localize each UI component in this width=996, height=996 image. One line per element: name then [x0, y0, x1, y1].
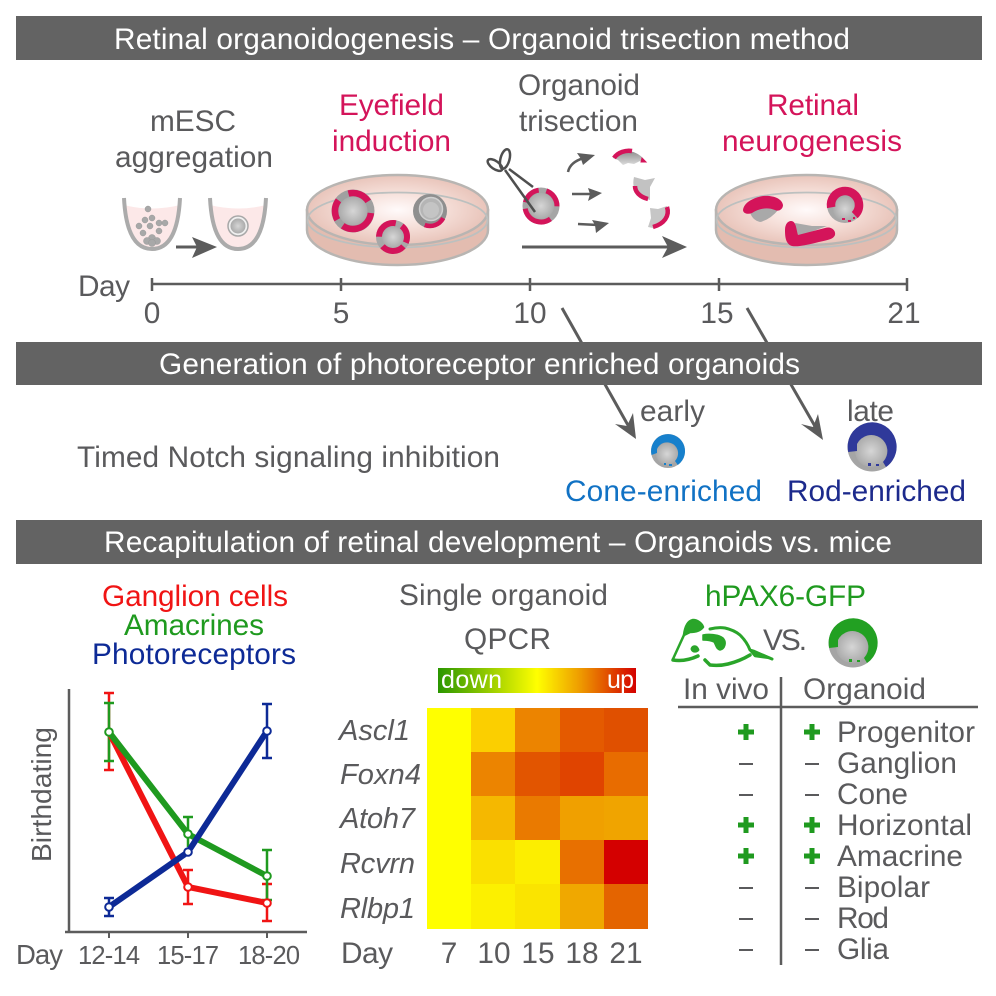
- header: photoreceptor enriched organoids: [16, 342, 982, 385]
- arrow: early inhibition: [562, 308, 636, 439]
- label: mESC aggregation: aggregation: [115, 141, 273, 174]
- chart axes: [65, 689, 307, 938]
- table rules: [678, 677, 978, 965]
- color scale: up: [607, 666, 634, 694]
- icon: well with scattered cells: [124, 198, 180, 249]
- heading: single organoid QPCR: [399, 579, 608, 656]
- timeline: 10: [513, 297, 547, 330]
- y axis label: Birthdating: [25, 727, 57, 862]
- color scale: down: [441, 666, 502, 694]
- icon: trisected fragments: [613, 151, 668, 228]
- heatmap day labels: 15: [521, 937, 555, 970]
- series: amacrines: [105, 728, 271, 880]
- line chart: birthdating: [16, 689, 307, 970]
- series: photoreceptors: [105, 727, 271, 911]
- label: Organoid trisection: trisection: [519, 105, 638, 138]
- label: Eyefield induction: [332, 89, 451, 158]
- legend: cell types: [92, 580, 296, 671]
- heatmap day labels: 7: [441, 937, 457, 970]
- label: late: late: [847, 395, 894, 428]
- heatmap gene labels: Rcvrn: [340, 848, 415, 880]
- cell type labels: Cone: [837, 778, 908, 811]
- icon: GFP organoid: [828, 618, 878, 668]
- error bars: [104, 693, 272, 921]
- cell type labels: Ganglion: [837, 747, 957, 780]
- icon: scissors: [486, 148, 535, 212]
- heatmap day labels: 21: [609, 937, 643, 970]
- arrow: well to well: [176, 237, 217, 258]
- heatmap day labels: [341, 937, 643, 970]
- arrow: late inhibition: [747, 308, 823, 440]
- icon: petri dish with eyefield organoids: [307, 175, 488, 265]
- timeline: 21: [887, 297, 921, 330]
- timeline: [78, 270, 921, 330]
- label: mESC aggregation: [115, 105, 273, 174]
- header: photoreceptor enriched organoids: Generation of photoreceptor enriched organoids: [159, 348, 800, 381]
- legend: cell types: Ganglion cells: [102, 580, 288, 613]
- cell type labels: Progenitor: [837, 716, 975, 749]
- x axis labels: Day: [16, 939, 63, 970]
- table header: In vivo: [683, 673, 769, 706]
- heatmap: [427, 708, 648, 929]
- heatmap gene labels: [337, 715, 421, 925]
- x axis labels: [16, 939, 300, 970]
- cell type labels: Amacrine: [837, 840, 963, 873]
- x axis labels: 15-17: [157, 942, 219, 970]
- heading: single organoid QPCR: Single organoid: [399, 579, 608, 612]
- organoid 1: [331, 189, 375, 233]
- header: recapitulation of retinal development: Recapitulation of retinal development – Organoids vs. mice: [104, 526, 892, 559]
- icon: rod-enriched organoid: [848, 422, 897, 472]
- label: Retinal neurogenesis: Retinal: [767, 89, 859, 122]
- arrows: fragments: [568, 153, 609, 233]
- heading: single organoid QPCR: QPCR: [464, 623, 551, 656]
- organoid fragment left: [743, 196, 783, 222]
- legend: cell types: Amacrines: [124, 609, 264, 642]
- heatmap gene labels: Foxn4: [340, 759, 421, 791]
- color scale: [438, 666, 636, 694]
- label: Organoid trisection: [518, 69, 640, 138]
- label: mESC aggregation: mESC: [150, 105, 236, 138]
- heatmap day labels: 18: [565, 937, 599, 970]
- table header: [683, 673, 926, 706]
- label: Cone-enriched: Cone-enriched: [565, 475, 762, 508]
- table header: Organoid: [803, 673, 926, 706]
- header: recapitulation of retinal development: [16, 520, 982, 564]
- header: retinal organoidogenesis: Retinal organoidogenesis – Organoid trisection method: [114, 23, 850, 56]
- label: Organoid trisection: Organoid: [518, 69, 640, 102]
- label: Eyefield induction: induction: [332, 125, 451, 158]
- in vivo markers: [738, 724, 754, 950]
- text: timed Notch signaling inhibition: Timed Notch signaling inhibition: [77, 441, 500, 474]
- table: cell type expression: [678, 673, 978, 966]
- icon: well with aggregate: [210, 198, 266, 249]
- heatmap gene labels: Rlbp1: [340, 893, 415, 925]
- heatmap day labels: Day: [341, 937, 393, 970]
- heatmap day labels: 10: [477, 937, 511, 970]
- cell type labels: Glia: [837, 933, 889, 966]
- legend: cell types: Photoreceptors: [92, 638, 296, 671]
- arrow: long process: [522, 236, 687, 258]
- organoid fragment right: [827, 187, 863, 223]
- organoid markers: [804, 724, 820, 950]
- icon: mouse outline: [673, 620, 772, 665]
- header: retinal organoidogenesis: [16, 16, 982, 60]
- organoid 3: [410, 191, 450, 231]
- heatmap gene labels: Atoh7: [338, 803, 417, 835]
- label: Eyefield induction: Eyefield: [339, 89, 444, 122]
- cell type labels: [837, 716, 975, 966]
- cell type labels: Horizontal: [837, 809, 972, 842]
- cell type labels: Bipolar: [837, 871, 930, 904]
- icon: petri dish with neurogenic organoids: [716, 175, 897, 265]
- organoid 2: [376, 220, 410, 254]
- label: Retinal neurogenesis: neurogenesis: [722, 125, 902, 158]
- label: Rod-enriched: Rod-enriched: [787, 475, 966, 508]
- timeline: Day: [78, 270, 130, 303]
- series: ganglion cells: [109, 732, 271, 907]
- x axis labels: 18-20: [238, 942, 300, 970]
- x axis labels: 12-14: [78, 942, 140, 970]
- label: VS.: VS.: [763, 624, 807, 657]
- label: early: early: [640, 395, 705, 428]
- label: Retinal neurogenesis: [722, 89, 902, 158]
- cell type labels: Rod: [837, 902, 889, 935]
- timeline: 0: [144, 297, 160, 330]
- heatmap gene labels: Ascl1: [337, 715, 410, 747]
- icon: cone-enriched organoid: [651, 434, 685, 468]
- icon: organoid being cut: [521, 186, 561, 226]
- heading: hPAX6-GFP: hPAX6-GFP: [705, 580, 866, 613]
- timeline: 5: [333, 297, 349, 330]
- timeline: 15: [700, 297, 734, 330]
- organoid fragment middle: [785, 221, 835, 246]
